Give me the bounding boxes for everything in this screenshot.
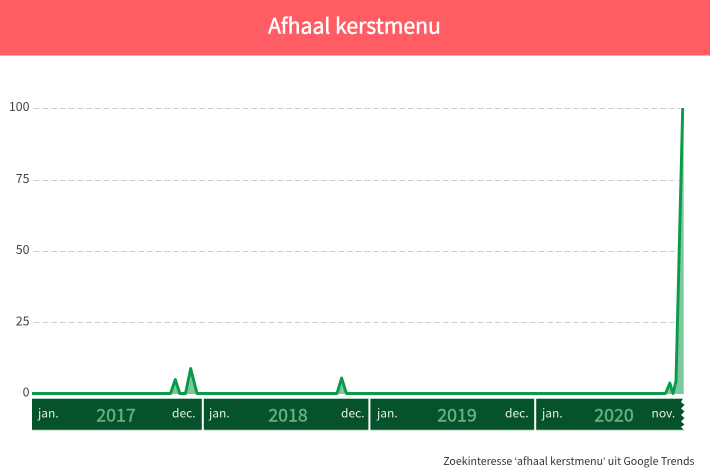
- y-axis labels: 100: [9, 97, 30, 115]
- area fill under the line: [170, 108, 684, 394]
- y-axis labels: 0: [23, 382, 30, 400]
- month labels: [37, 404, 675, 422]
- month labels: jan.: [541, 404, 563, 422]
- year labels: 2018: [268, 402, 308, 428]
- month labels: jan.: [376, 404, 398, 422]
- month labels: dec.: [505, 404, 529, 422]
- year labels: 2019: [437, 402, 477, 428]
- source note: Zoekinteresse ‘afhaal kerstmenu’ uit Google Trends: [443, 454, 695, 469]
- line chart: search interest: [9, 97, 684, 400]
- month labels: jan.: [37, 404, 59, 422]
- year labels: 2020: [594, 402, 634, 428]
- y-axis labels: 75: [16, 169, 30, 187]
- y-axis labels: 50: [16, 240, 30, 258]
- month labels: nov.: [652, 404, 675, 422]
- timeline band: [32, 398, 684, 431]
- y-axis labels: [9, 97, 30, 400]
- year labels: [96, 402, 634, 428]
- title banner: [0, 0, 710, 56]
- month labels: jan.: [208, 404, 230, 422]
- y-axis labels: 25: [16, 312, 30, 330]
- month labels: dec.: [341, 404, 365, 422]
- title banner: Afhaal kerstmenu: [268, 10, 441, 40]
- month labels: dec.: [172, 404, 196, 422]
- year labels: 2017: [96, 402, 136, 428]
- data line: [32, 108, 683, 394]
